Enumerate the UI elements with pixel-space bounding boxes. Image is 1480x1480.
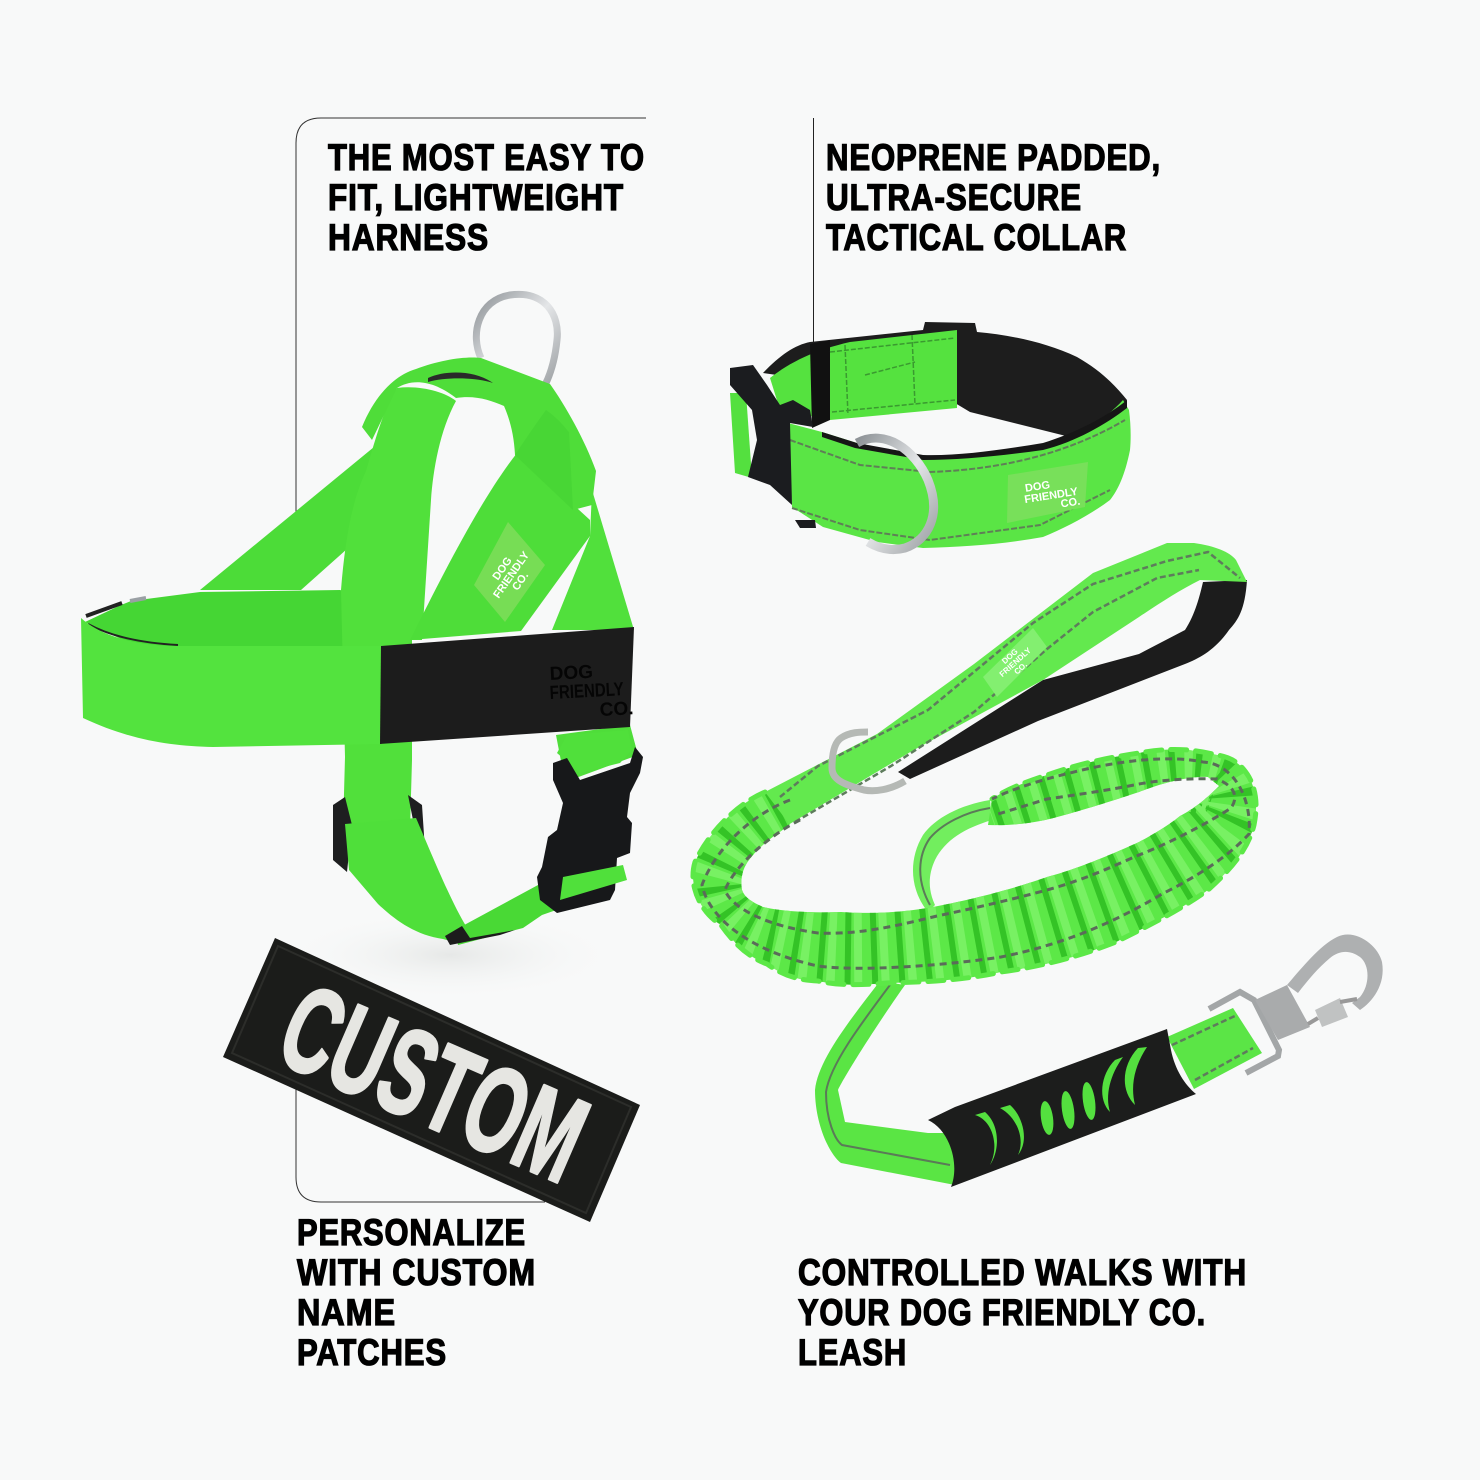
collar logo tag: FRIENDLY xyxy=(1024,486,1079,506)
collar logo tag: DOG xyxy=(1024,479,1051,495)
collar front band xyxy=(788,400,1131,548)
leash ring xyxy=(832,732,905,791)
collar D ring xyxy=(857,438,934,550)
harness black leather patch: DOG xyxy=(549,662,593,685)
leash metal clasp xyxy=(1209,935,1383,1073)
harness lower loop strap xyxy=(345,818,466,943)
leash handle tag: DOG xyxy=(1000,647,1020,666)
collar logo tag: CO. xyxy=(1060,496,1081,511)
heading: leash: YOUR DOG FRIENDLY CO. xyxy=(798,1292,1206,1333)
harness front belly band xyxy=(81,618,381,747)
harness black buckle xyxy=(537,747,643,913)
heading: collar: ULTRA-SECURE xyxy=(826,177,1082,218)
harness logo tag: DOG xyxy=(491,555,515,583)
leash lower strap xyxy=(815,981,965,1185)
heading: patches: NAME xyxy=(297,1292,396,1333)
heading: patches: WITH CUSTOM xyxy=(297,1252,536,1293)
harness back band xyxy=(85,590,381,648)
harness upper buckle strap xyxy=(557,730,632,773)
heading: leash: CONTROLLED WALKS WITH xyxy=(798,1252,1247,1293)
custom name patch: CUSTOM xyxy=(262,958,606,1208)
custom name patch xyxy=(223,938,640,1222)
harness top yoke xyxy=(362,357,596,510)
collar callout leader line xyxy=(812,118,814,345)
leash black rubber grip xyxy=(928,1029,1196,1187)
leash handle tag xyxy=(983,628,1047,697)
harness vertical strap xyxy=(341,387,456,830)
heading: patches: PERSONALIZE xyxy=(297,1212,526,1253)
patch callout leader line xyxy=(296,1085,545,1202)
heading: patches xyxy=(297,1212,536,1373)
collar product xyxy=(730,322,1131,550)
heading: leash: LEASH xyxy=(798,1332,907,1373)
leash product xyxy=(680,543,1383,1187)
harness right vertical strap xyxy=(552,490,634,630)
harness logo tag xyxy=(474,522,545,622)
collar inner green section xyxy=(770,330,957,420)
harness product xyxy=(81,294,643,1000)
harness logo tag: CO. xyxy=(510,570,531,593)
heading: harness: HARNESS xyxy=(328,217,489,258)
collar metal buckle xyxy=(730,365,816,528)
heading: harness: FIT, LIGHTWEIGHT xyxy=(328,177,624,218)
leash thin strap behind bungee xyxy=(913,800,992,912)
harness lower rising strap xyxy=(455,878,562,945)
collar black neoprene lining xyxy=(763,322,1127,450)
heading: collar xyxy=(826,137,1161,258)
leash handle padding xyxy=(898,580,1247,779)
heading: leash xyxy=(798,1252,1247,1373)
heading: harness: THE MOST EASY TO xyxy=(328,137,645,178)
heading: collar: TACTICAL COLLAR xyxy=(826,217,1127,258)
harness logo tag: FRIENDLY xyxy=(491,549,532,601)
heading: patches: PATCHES xyxy=(297,1332,447,1373)
leash handle tag: FRIENDLY xyxy=(998,645,1033,679)
collar left webbing xyxy=(730,393,752,478)
harness chest diagonal strap xyxy=(410,453,590,640)
harness black leather patch xyxy=(380,627,634,744)
harness metal ring xyxy=(476,294,557,385)
collar logo tag xyxy=(1007,462,1088,523)
heading: collar: NEOPRENE PADDED, xyxy=(826,137,1161,178)
leash handle strap xyxy=(765,543,1247,825)
harness callout leader line xyxy=(296,118,646,512)
harness black leather patch: CO. xyxy=(599,698,634,721)
harness left diagonal strap xyxy=(200,447,395,590)
leash bungee section xyxy=(690,747,1258,988)
leash strap near clasp xyxy=(1167,1008,1262,1089)
harness lower sliders xyxy=(333,795,425,872)
heading: harness xyxy=(328,137,645,258)
harness black leather patch: FRIENDLY xyxy=(549,679,624,704)
leash handle tag: CO. xyxy=(1012,660,1029,676)
